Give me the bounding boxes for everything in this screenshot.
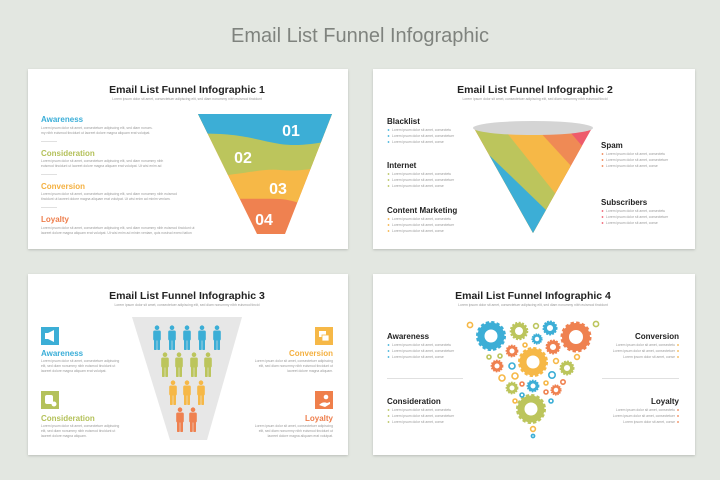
panel 2 left labels: Lorem ipsum dolor sit amet, consectetu <box>392 217 451 221</box>
consideration text: Lorem ipsum dolor sit amet, consectetuer adipiscing <box>41 424 119 428</box>
panel 2 left labels: Lorem ipsum dolor sit amet, consectetu <box>392 172 451 176</box>
panel 4 right labels <box>602 332 680 424</box>
panel 2 subtitle: Lorem ipsum dolor sit amet, consectetuer adipiscing elit, sed diam nonummy nibh euismod tincid <box>463 97 608 101</box>
panel 4 right labels: Lorem ipsum dolor sit amet, consectetu <box>616 343 675 347</box>
panel 1 stage list: Conversion <box>41 182 85 191</box>
panel 2 title: Email List Funnel Infographic 2 <box>457 84 613 96</box>
panel 2 left labels: Lorem ipsum dolor sit amet, conse <box>392 184 444 188</box>
panel 2 left labels: Lorem ipsum dolor sit amet, consectetu <box>392 128 451 132</box>
panel 2 left labels: Lorem ipsum dolor sit amet, consectetuer <box>392 178 455 182</box>
panel 1 stage list: Lorem ipsum dolor sit amet, consectetuer adipiscing elit, sed diam nonummy nibh euismod <box>41 192 177 196</box>
panel 4 left labels <box>387 332 463 424</box>
panel 4 left labels: Consideration <box>387 397 441 406</box>
panel 1 stage list: Lorem ipsum dolor sit amet, consectetuer adipiscing elit, sed diam nonummy nibh euismod tincidunt ut <box>41 226 194 230</box>
panel 2 left labels: Lorem ipsum dolor sit amet, conse <box>392 140 444 144</box>
panel 2 left labels: Content Marketing <box>387 206 457 215</box>
panel 2 right labels: Lorem ipsum dolor sit amet, consectetuer <box>606 215 669 219</box>
panel 2 left labels: Lorem ipsum dolor sit amet, consectetuer <box>392 134 455 138</box>
panel 1 stage list: laoreet dolore magna aliquam erat volutpat. Ut wisi enim ad minim veniam, quis nostrud exerci tation <box>41 231 192 235</box>
panel 3 title: Email List Funnel Infographic 3 <box>109 290 265 302</box>
panel 1 subtitle: Lorem ipsum dolor sit amet, consectetuer adipiscing elit, sed diam nonummy nibh euismod tincidunt <box>112 97 262 101</box>
panel 4 left labels: Lorem ipsum dolor sit amet, conse <box>392 355 444 359</box>
panel 1 stage list: Awareness <box>41 115 84 124</box>
panel 1 stage list: my nibh euismod tincidunt ut laoreet dolore magna aliquam erat volutpat. <box>41 131 150 135</box>
panel 4 left labels: Lorem ipsum dolor sit amet, consectetuer <box>392 349 455 353</box>
panel 2 <box>372 69 696 251</box>
awareness text <box>41 349 119 373</box>
panel 1 funnel <box>198 114 332 234</box>
panel 4 right labels: Lorem ipsum dolor sit amet, conse <box>623 420 675 424</box>
panel 1 title: Email List Funnel Infographic 1 <box>109 84 265 96</box>
panel 2 right labels <box>601 141 669 225</box>
panel 2 cone <box>473 121 593 233</box>
conversion text: Lorem ipsum dolor sit amet, consectetuer adipiscing <box>255 359 333 363</box>
panel 4 title: Email List Funnel Infographic 4 <box>455 290 611 302</box>
conversion text <box>255 349 333 373</box>
gear funnel <box>467 321 599 438</box>
panel 4 right labels: Loyalty <box>651 397 680 406</box>
panel 4 right labels: Conversion <box>635 332 679 341</box>
awareness text: Lorem ipsum dolor sit amet, consectetuer adipiscing <box>41 359 119 363</box>
panel 1 stage list: euismod tincidunt ut laoreet dolore magna aliquam erat volutpat. Ut wisi enim ad <box>41 164 162 168</box>
main title: Email List Funnel Infographic <box>231 25 489 47</box>
loyalty text: elit, sed diam nonummy nibh euismod tincidunt ut <box>259 429 333 433</box>
panel 1 stage list: Loyalty <box>41 215 70 224</box>
consideration text: laoreet dolore magna aliquam. <box>41 434 87 438</box>
loyalty text: laoreet dolore magna aliquam erat volutpat. <box>268 434 333 438</box>
panel 2 left labels: Blacklist <box>387 117 420 126</box>
panel 2 left labels <box>387 117 457 233</box>
funnel numbers: 01 <box>282 123 300 140</box>
funnel numbers: 02 <box>234 150 252 167</box>
loyalty text: Loyalty <box>305 414 334 423</box>
panel 1 stage list: Lorem ipsum dolor sit amet, consectetuer adipiscing elit, sed diam nonummy nibh <box>41 159 163 163</box>
conversion text: laoreet dolore magna aliquam. <box>287 369 333 373</box>
panel 1 stage list: tincidunt ut laoreet dolore magna aliquam erat volutpat. Ut wisi enim ad minim veniam. <box>41 197 171 201</box>
loyalty text: Lorem ipsum dolor sit amet, consectetuer adipiscing <box>255 424 333 428</box>
consideration text <box>41 414 119 438</box>
awareness text: laoreet dolore magna aliquam erat volutpat. <box>41 369 106 373</box>
funnel numbers <box>234 123 300 229</box>
panel 3 gray funnel with people <box>132 317 242 440</box>
panel 1 stage list <box>41 115 194 235</box>
panel 4 right labels: Lorem ipsum dolor sit amet, consectetuer <box>613 349 676 353</box>
panel 4 left labels: Lorem ipsum dolor sit amet, consectetu <box>392 408 451 412</box>
panel 1 stage list: Consideration <box>41 149 95 158</box>
panel 1 stage list: Lorem ipsum dolor sit amet, consectetuer adipiscing elit, sed diam nonum- <box>41 126 153 130</box>
icon: chat <box>315 327 333 345</box>
panel 2 right labels: Lorem ipsum dolor sit amet, conse <box>606 164 658 168</box>
panel 2 right labels: Lorem ipsum dolor sit amet, consectetu <box>606 209 665 213</box>
panel 4 left labels: Lorem ipsum dolor sit amet, conse <box>392 420 444 424</box>
panel 4 right labels: Lorem ipsum dolor sit amet, consectetu <box>616 408 675 412</box>
consideration text: Consideration <box>41 414 95 423</box>
loyalty text <box>255 414 334 438</box>
panel 1 <box>28 69 348 249</box>
awareness text: Awareness <box>41 349 84 358</box>
icon: hand <box>315 391 333 409</box>
panel 2 right labels: Lorem ipsum dolor sit amet, conse <box>606 221 658 225</box>
icon: megaphone <box>41 327 59 345</box>
panel 2 left labels: Lorem ipsum dolor sit amet, consectetuer <box>392 223 455 227</box>
panel 4 <box>373 274 695 455</box>
panel 4 subtitle: Lorem ipsum dolor sit amet, consectetuer adipiscing elit, sed diam nonummy nibh euismod tincidunt <box>458 303 608 307</box>
conversion text: elit, sed diam nonummy nibh euismod tincidunt ut <box>259 364 333 368</box>
panel 4 left labels: Lorem ipsum dolor sit amet, consectetu <box>392 343 451 347</box>
panel 2 right labels: Subscribers <box>601 198 648 207</box>
awareness text: elit, sed diam nonummy nibh euismod tincidunt ut <box>41 364 115 368</box>
panel 2 right labels: Lorem ipsum dolor sit amet, consectetu <box>606 152 665 156</box>
panel 2 right labels: Spam <box>601 141 623 150</box>
panel 4 left labels: Lorem ipsum dolor sit amet, consectetuer <box>392 414 455 418</box>
consideration text: elit, sed diam nonummy nibh euismod tincidunt ut <box>41 429 115 433</box>
icon: consideration <box>41 391 59 409</box>
panel 3 subtitle: Lorem ipsum dolor sit amet, consectetuer adipiscing elit, sed diam nonummy nibh euismod tincid <box>115 303 260 307</box>
panel 2 left labels: Internet <box>387 161 417 170</box>
panel 2 right labels: Lorem ipsum dolor sit amet, consectetuer <box>606 158 669 162</box>
funnel numbers: 04 <box>255 212 273 229</box>
conversion text: Conversion <box>289 349 333 358</box>
panel 4 left labels: Awareness <box>387 332 430 341</box>
funnel numbers: 03 <box>269 181 287 198</box>
panel 4 right labels: Lorem ipsum dolor sit amet, consectetuer <box>613 414 676 418</box>
panel 2 left labels: Lorem ipsum dolor sit amet, conse <box>392 229 444 233</box>
panel 3 <box>28 274 348 455</box>
panel 4 right labels: Lorem ipsum dolor sit amet, conse <box>623 355 675 359</box>
